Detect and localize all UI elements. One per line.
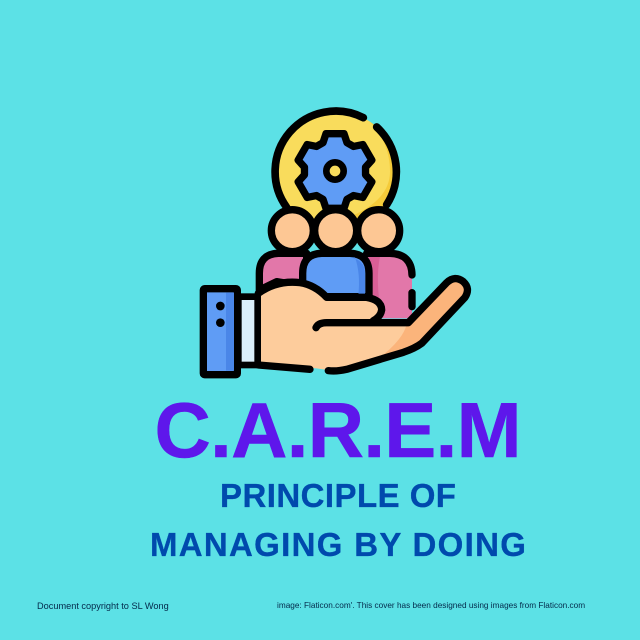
subtitle: PRINCIPLE OF bbox=[220, 477, 456, 514]
right person body bbox=[367, 253, 412, 318]
left person body bbox=[259, 253, 307, 290]
heads bbox=[271, 210, 313, 252]
image credit: image: Flaticon.com'. This cover has been designed using images from Flaticon.com bbox=[277, 601, 585, 610]
icon: open hand bbox=[258, 278, 467, 371]
subtitle bbox=[150, 477, 527, 563]
icon: gear bbox=[298, 134, 372, 208]
icon: yellow circle with gear bbox=[275, 111, 396, 232]
center person body bbox=[303, 253, 369, 297]
icon: shirt cuff bbox=[203, 289, 258, 375]
title: C.A.R.E.M bbox=[154, 386, 521, 474]
copyright note: Document copyright to SL Wong bbox=[37, 601, 169, 611]
subtitle: MANAGING BY DOING bbox=[150, 526, 527, 563]
icon: team of three people bbox=[259, 210, 412, 318]
icon: hand holding team and gear bbox=[200, 107, 472, 378]
